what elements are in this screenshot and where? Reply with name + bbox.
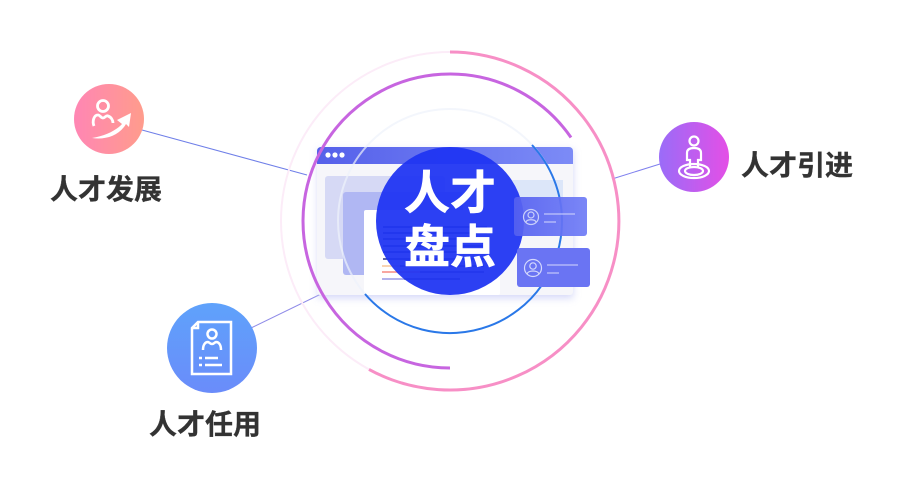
center circle	[376, 147, 524, 295]
document text lines	[382, 227, 487, 279]
browser window mockup	[317, 147, 573, 298]
node: 人才发展	[50, 84, 162, 205]
node: 人才引进	[659, 122, 853, 192]
label: 人才发展	[50, 174, 162, 205]
label: 人才引进	[741, 150, 853, 181]
faint outer ring	[281, 52, 619, 390]
connector lines	[142, 130, 660, 328]
ring: purple arc	[303, 74, 571, 368]
center circle: 盘点	[404, 221, 496, 273]
profile card lower	[517, 248, 590, 287]
window title bar	[317, 147, 573, 164]
label: 人才任用	[149, 409, 261, 440]
layered content blocks	[325, 176, 445, 259]
icon: person with rising arrow	[74, 84, 144, 154]
ring: outer pink arc	[369, 52, 619, 390]
icon: resume document	[167, 303, 257, 393]
node: 人才任用	[149, 303, 261, 440]
icon: person on target	[659, 122, 729, 192]
window dots	[325, 152, 345, 158]
profile card upper	[514, 197, 587, 236]
faint inner ring	[338, 109, 562, 333]
ring: blue arc	[365, 145, 562, 333]
center title: 人才	[404, 167, 496, 219]
